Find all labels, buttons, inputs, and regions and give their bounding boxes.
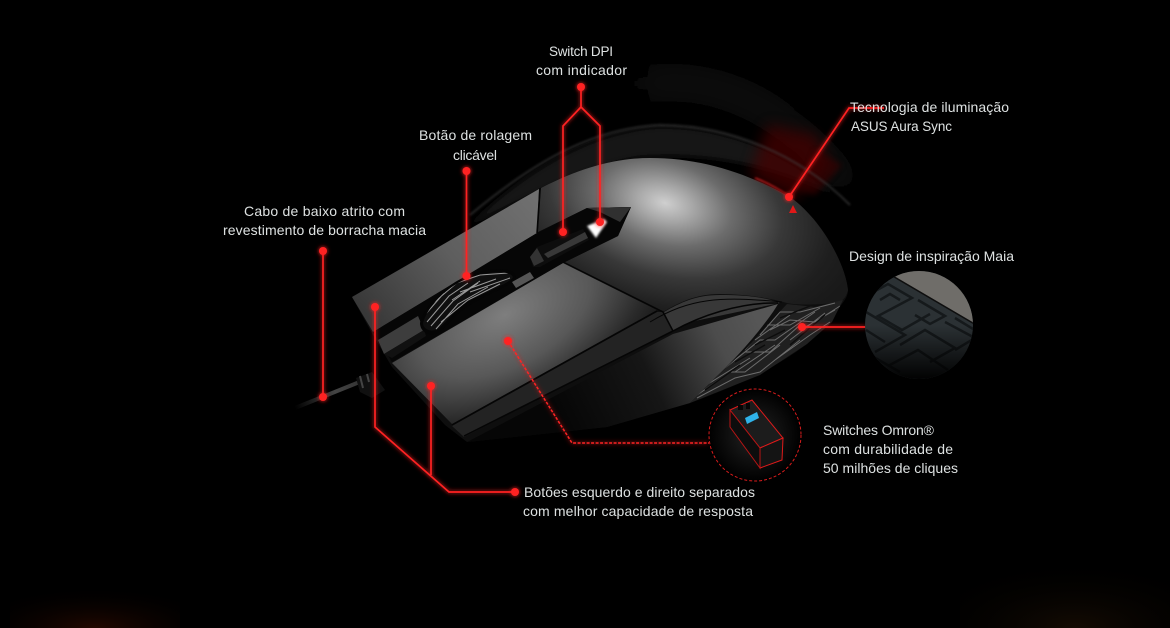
callout: Aura Sync line: [785, 108, 884, 201]
scroll wheel: [420, 272, 512, 332]
bottom ember glow right: [960, 540, 1170, 628]
label: scroll button: clicável: [453, 147, 497, 163]
side strip upper: [664, 295, 780, 331]
callout: scroll wheel line: [462, 167, 470, 280]
DPI indicator light: [587, 219, 607, 238]
center slot: [373, 207, 631, 362]
label: Aura Sync: [850, 99, 1009, 134]
label: Omron switches: Switches Omron®: [823, 422, 935, 438]
label: Omron switches: [823, 422, 958, 476]
top shell: [538, 158, 848, 312]
label: Switch DPI: Switch DPI: [549, 44, 613, 59]
label: Aura Sync: ASUS Aura Sync: [851, 119, 952, 134]
DPI button: [530, 229, 589, 267]
callout: Switch DPI lines: [559, 83, 604, 236]
label: cable: Cabo de baixo atrito com: [244, 203, 405, 219]
red aura accent: [755, 178, 790, 197]
icon: Maya pattern magnifier: [865, 271, 973, 379]
motion trails behind the mouse: [470, 82, 850, 225]
label: Aura Sync: Tecnologia de iluminação: [850, 99, 1009, 115]
label: scroll button: Botão de rolagem: [419, 127, 532, 143]
cable: [295, 372, 385, 408]
label: separated buttons: Botões esquerdo e direito separados: [524, 484, 755, 500]
icon: Omron switch in dashed circle: [709, 389, 801, 481]
callout: cable line: [319, 247, 327, 401]
label: cable: revestimento de borracha macia: [223, 222, 426, 238]
label: Switch DPI: com indicador: [536, 62, 627, 78]
front side strip: [452, 312, 673, 437]
callout: Omron dashed line: [504, 337, 709, 443]
patterned grip: [690, 300, 843, 403]
mouse silhouette: [352, 158, 848, 442]
label: separated buttons: [523, 484, 755, 519]
mouse body: [352, 158, 850, 442]
lower side panel: [467, 304, 778, 442]
label: scroll button: [419, 127, 532, 163]
callout: Maya design line: [798, 323, 866, 331]
label: Omron switches: com durabilidade de: [823, 441, 953, 457]
bottom ember glow left: [10, 575, 180, 628]
label: separated buttons: com melhor capacidade de resposta: [523, 503, 753, 519]
button panel: [392, 263, 657, 424]
seam lines: [452, 188, 778, 436]
label: Switch DPI: [536, 44, 627, 78]
label: cable: [223, 203, 426, 238]
callout: left and right buttons lines: [371, 303, 519, 496]
label: Maya design: Design de inspiração Maia: [849, 248, 1014, 264]
left upper button panel: [352, 189, 539, 332]
label: Omron switches: 50 milhões de cliques: [823, 460, 958, 476]
